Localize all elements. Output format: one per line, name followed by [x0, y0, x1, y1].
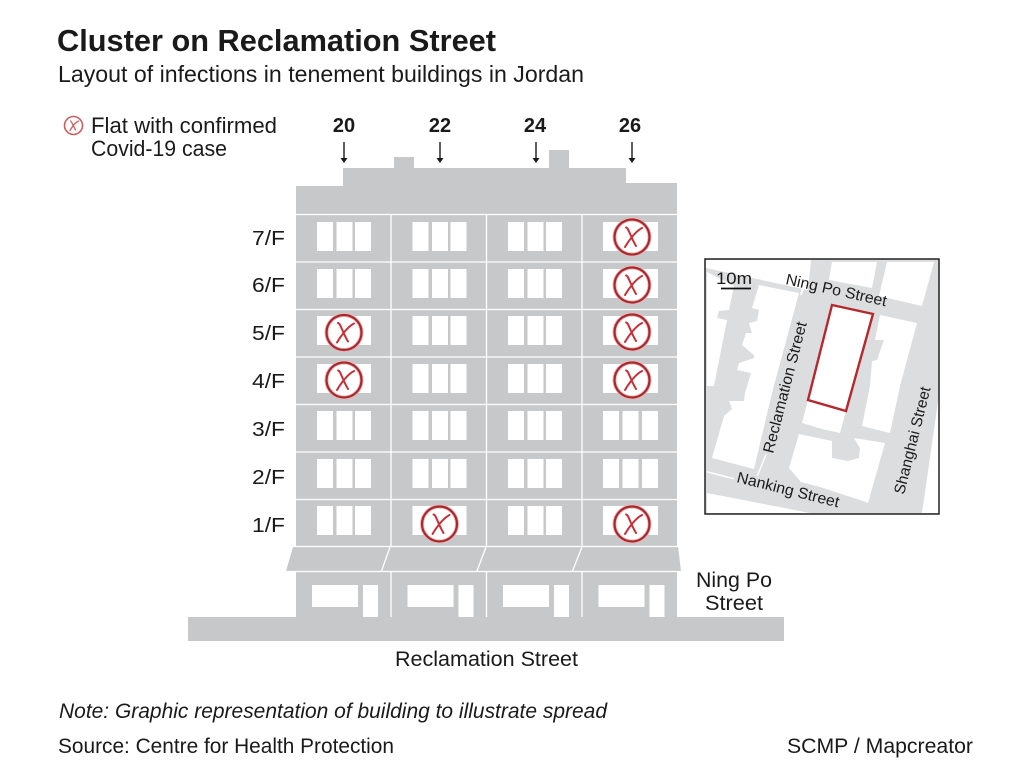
marker: 26, 6/F	[614, 268, 650, 302]
title: Cluster on Reclamation Street	[57, 23, 496, 58]
marker: 26, 4/F	[614, 362, 650, 398]
building numbers and arrows: 22	[429, 115, 451, 137]
windows	[317, 222, 658, 535]
floor labels: 1/F	[252, 515, 285, 537]
source: Source: Centre for Health Protection	[58, 735, 394, 758]
floor labels: 5/F	[252, 323, 285, 345]
floor labels: 2/F	[252, 467, 285, 489]
note: Note: Graphic representation of building to illustrate spread	[59, 700, 608, 723]
map street labels: Ning Po Street	[784, 271, 889, 310]
floor labels: 6/F	[252, 275, 285, 297]
marker: 26, 7/F	[614, 220, 650, 254]
marker: 20, 4/F	[326, 362, 362, 398]
credit: SCMP / Mapcreator	[787, 735, 973, 758]
floor labels	[252, 228, 285, 537]
marker: 26, 1/F	[614, 506, 650, 542]
legend text: Covid-19 case	[91, 136, 227, 161]
map city blocks	[706, 260, 939, 513]
confirmed case markers	[326, 220, 650, 542]
building numbers and arrows: 26	[619, 115, 641, 137]
shop windows and doors	[312, 585, 664, 617]
legend text: Flat with confirmed	[91, 113, 277, 138]
floor labels: 4/F	[252, 371, 285, 393]
pavement	[188, 617, 784, 641]
map road background	[705, 259, 939, 514]
map street labels: Shanghai Street	[891, 384, 935, 496]
icon: legend confirmed case marker	[64, 116, 82, 134]
floor labels: 7/F	[252, 228, 285, 250]
floor and column dividers	[286, 214, 681, 617]
marker: 22, 1/F	[422, 506, 457, 542]
marker: 26, 5/F	[614, 314, 650, 350]
street label: Ning Po Street: Street	[705, 592, 763, 615]
building illustration	[188, 150, 784, 641]
map street labels: Nanking Street	[735, 469, 842, 511]
street label: Reclamation Street: Reclamation Street	[395, 648, 578, 671]
map street labels	[735, 271, 935, 511]
building numbers and arrows: 24	[524, 115, 547, 137]
building numbers and arrows	[333, 115, 641, 163]
subtitle: Layout of infections in tenement buildings in Jordan	[58, 61, 584, 87]
floor labels: 3/F	[252, 419, 285, 441]
locator map	[705, 259, 939, 514]
map frame	[705, 259, 939, 514]
building numbers and arrows: 20	[333, 115, 355, 137]
marker: 20, 5/F	[326, 315, 362, 350]
highlighted block	[808, 305, 873, 411]
map street labels: Reclamation Street	[760, 319, 811, 455]
scale bar: 10m	[716, 269, 752, 288]
street label: Ning Po Street: Ning Po	[696, 569, 772, 592]
legend	[64, 113, 277, 161]
building facade	[286, 150, 681, 617]
